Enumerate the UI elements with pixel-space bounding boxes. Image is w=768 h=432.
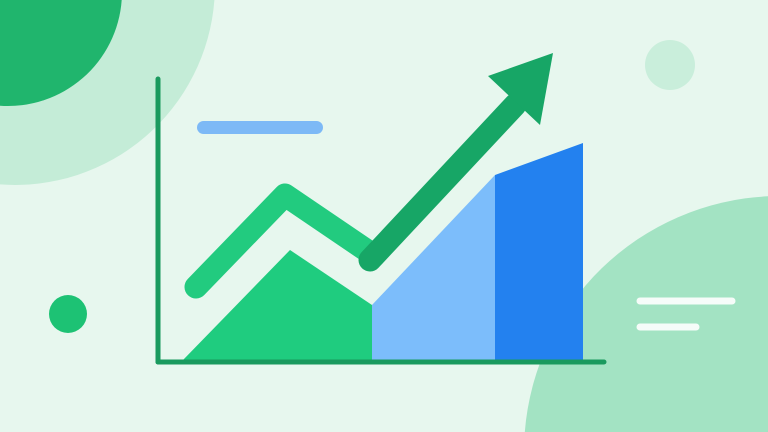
trend line (196, 195, 366, 287)
decor: green dot (49, 295, 87, 333)
legend pill (197, 121, 323, 134)
area: light blue (372, 175, 495, 360)
decor: top-left light circle (0, 0, 214, 185)
decor: bottom-right large circle (525, 196, 768, 432)
area: blue (495, 143, 583, 360)
chart areas (183, 143, 583, 360)
decor: small top-right circle (645, 40, 695, 90)
decor: top-left dark circle (0, 0, 122, 106)
area: green (183, 250, 372, 360)
arrow: upward trend (370, 53, 553, 260)
axes (158, 79, 604, 362)
decor: white lines (640, 301, 732, 327)
